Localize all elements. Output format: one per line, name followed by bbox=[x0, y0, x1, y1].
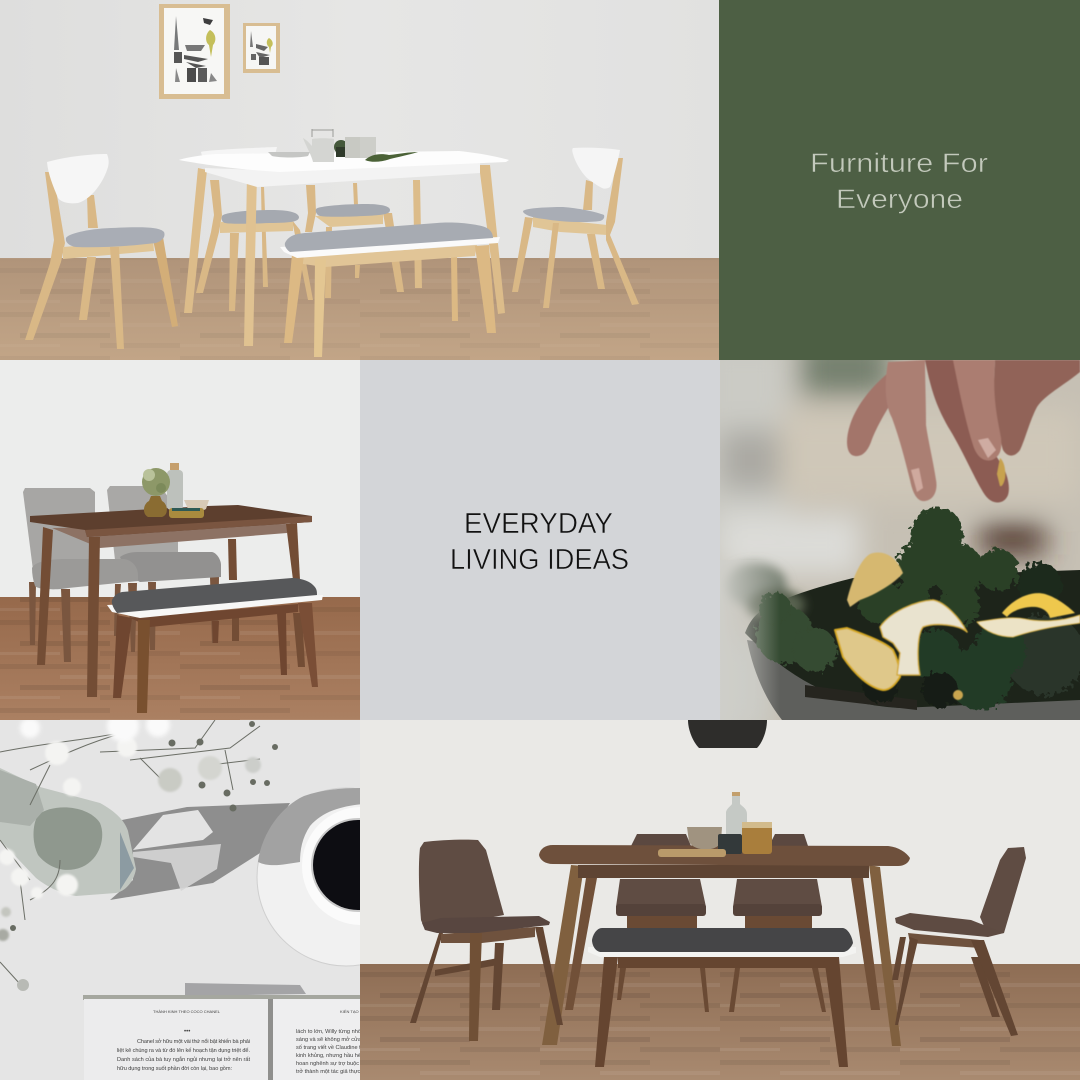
baby breath sprigs bbox=[0, 710, 278, 991]
bench bbox=[107, 578, 323, 713]
back right chair bbox=[305, 183, 404, 298]
book text: Chanel sở hữu một vài thứ nổi bật khiến bà phải bbox=[137, 1038, 250, 1045]
heading: Everyday Living Ideas: LIVING IDEAS bbox=[450, 544, 629, 576]
heading: Furniture For Everyone: Everyone bbox=[836, 184, 963, 214]
blurred background bbox=[720, 360, 1065, 712]
book text: trở thành một tác giả thực bbox=[296, 1068, 361, 1075]
panel: green title block bbox=[719, 0, 1080, 360]
book text: hoan nghênh sự trợ buộc để bbox=[296, 1060, 367, 1067]
book text: số trang viết về Claudine trong bbox=[296, 1045, 372, 1051]
glass vase bbox=[0, 768, 136, 896]
book text: sáng và sẽ không mở cửa cho bbox=[296, 1036, 372, 1043]
tabletop objects bbox=[658, 792, 772, 857]
book text: kinh khủng, nhưng hầu hết c bbox=[296, 1052, 367, 1059]
greens bbox=[756, 507, 1080, 710]
left edge fade bbox=[720, 560, 780, 720]
heading: Furniture For Everyone: Furniture For bbox=[810, 148, 988, 178]
right chair bbox=[892, 847, 1026, 1036]
grey chairs bbox=[23, 486, 221, 662]
icon: large wall frame bbox=[159, 4, 230, 99]
bench bbox=[280, 222, 500, 357]
open book bbox=[83, 983, 372, 1080]
book text: THÀNH KINH THEO COCO CHANEL bbox=[153, 1009, 221, 1014]
shadow of vase bbox=[110, 803, 290, 900]
back chairs bbox=[616, 834, 826, 1012]
back left chair bbox=[196, 147, 313, 311]
panel: white dining set photo bbox=[0, 0, 719, 360]
panel: table top still life photo bbox=[0, 720, 360, 1080]
book text: Danh sách của bà tuy ngắn ngủi nhưng lại trở nên rất bbox=[117, 1056, 250, 1063]
walnut table bbox=[30, 505, 312, 697]
panel: grey text block bbox=[360, 360, 720, 720]
tabletop objects bbox=[268, 129, 418, 162]
lemons bbox=[835, 552, 1080, 700]
wood table bbox=[539, 845, 910, 1046]
heading: Everyday Living Ideas bbox=[450, 508, 629, 576]
bench bbox=[588, 928, 856, 1067]
left wooden chair bbox=[25, 154, 178, 349]
icon: pendant lamp bbox=[688, 720, 767, 748]
book text: KIẾN TẠO bbox=[340, 1009, 359, 1014]
white table bbox=[179, 151, 509, 346]
vase and tray bbox=[142, 463, 209, 518]
icon: fingers bbox=[847, 360, 1080, 502]
right wooden chair bbox=[512, 148, 639, 308]
left chair bbox=[410, 840, 563, 1041]
heading: Furniture For Everyone bbox=[810, 148, 988, 214]
bowl bbox=[745, 570, 1080, 720]
panel: food photo bbox=[720, 360, 1080, 720]
panel: brown dining set photo bbox=[360, 720, 1080, 1080]
book text: liệt kê chúng ra và từ đó lên kế hoạch tận dụng triệt để. bbox=[117, 1047, 250, 1054]
icon: coffee cup and saucer bbox=[256, 788, 360, 966]
book text: lách to lớn, Willy từng nhờ bbox=[296, 1029, 362, 1035]
book text: ••• bbox=[184, 1029, 190, 1035]
heading: Everyday Living Ideas: EVERYDAY bbox=[464, 508, 613, 540]
left blurred sprigs bbox=[723, 563, 805, 621]
panel: walnut dining set photo bbox=[0, 360, 360, 720]
icon: small wall frame bbox=[243, 23, 280, 73]
book text bbox=[117, 1009, 372, 1075]
book text: hữu dụng trong suốt phần đời còn lại, bao gồm: bbox=[117, 1066, 232, 1072]
